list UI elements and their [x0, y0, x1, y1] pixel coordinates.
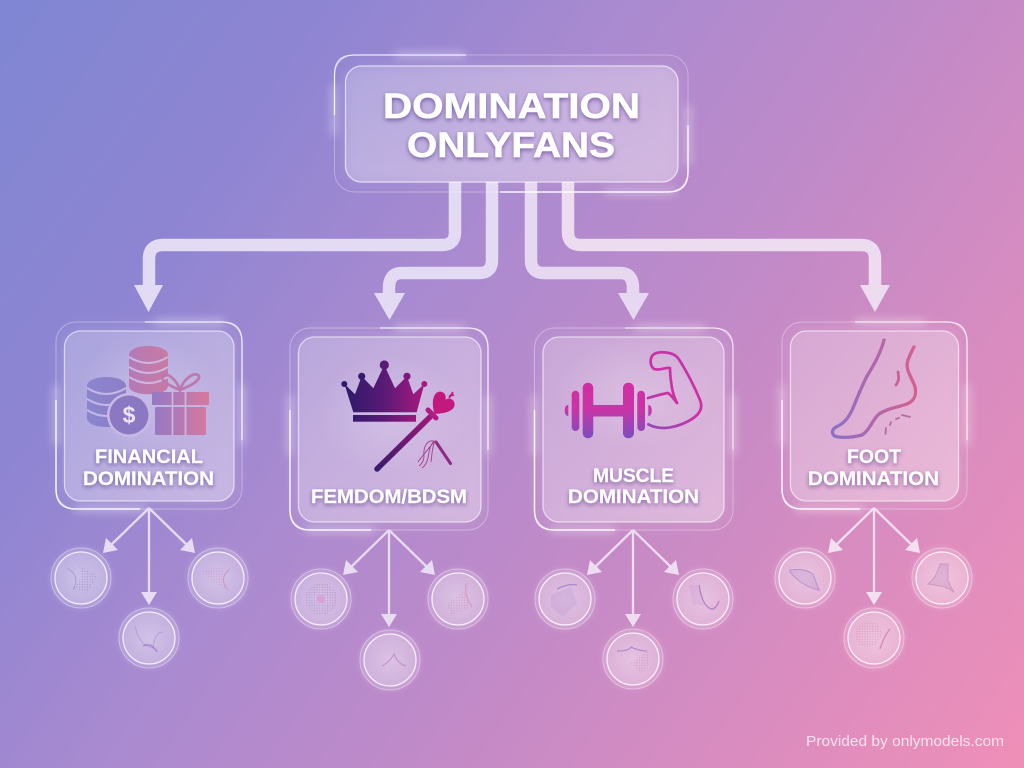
node 2	[911, 547, 973, 609]
node 3	[359, 629, 421, 691]
sub-branch arrows: muscle	[587, 530, 679, 627]
arrow to femdom/bdsm	[374, 182, 492, 320]
icon: crown, scepter and whip	[317, 355, 467, 475]
sub-node circles: femdom/bdsm	[290, 568, 489, 691]
sub-branch arrows: foot	[828, 508, 920, 605]
title text	[383, 87, 640, 165]
sub-node circles: financial	[50, 547, 249, 669]
arrow to financial domination	[134, 182, 455, 312]
sub-node circles: muscle	[534, 568, 734, 690]
label: muscle domination: DOMINATION	[568, 487, 699, 508]
label: muscle domination	[568, 466, 699, 508]
node 1	[290, 568, 352, 630]
arrow to foot domination	[568, 182, 890, 312]
label: foot domination: DOMINATION	[808, 469, 939, 490]
branching arrows from title to categories	[134, 182, 890, 320]
node 1	[774, 547, 836, 609]
panel: femdom/bdsm	[290, 328, 488, 530]
icon: coins and gift: $	[123, 402, 136, 428]
label: foot domination	[808, 447, 939, 490]
node 1	[534, 568, 596, 630]
panel: muscle domination	[534, 328, 733, 530]
title panel	[334, 55, 688, 192]
label: foot domination: FOOT	[847, 447, 901, 468]
node 2	[672, 568, 734, 630]
node 3	[602, 628, 664, 690]
credit text: Provided by onlymodels.com	[806, 734, 1004, 750]
panel: financial domination	[56, 322, 242, 509]
label: financial domination	[83, 447, 214, 490]
icon: foot	[832, 340, 916, 437]
icon: dumbbell and flexed arm	[554, 340, 714, 450]
node 2	[187, 547, 249, 609]
label: muscle domination: MUSCLE	[593, 466, 674, 487]
sub-node circles: foot	[774, 547, 973, 669]
node 3	[118, 607, 180, 669]
label: femdom/bdsm: FEMDOM/BDSM	[311, 487, 467, 508]
title text: ONLYFANS	[407, 126, 615, 165]
node 3	[843, 607, 905, 669]
label: financial domination: FINANCIAL	[95, 447, 203, 468]
sub-branch arrows: financial	[103, 508, 195, 605]
node 1	[50, 547, 112, 609]
label: financial domination: DOMINATION	[83, 469, 214, 490]
sub-branch arrows: femdom/bdsm	[343, 530, 435, 627]
node 2	[427, 568, 489, 630]
title text: DOMINATION	[383, 87, 640, 126]
arrow to muscle domination	[531, 182, 649, 320]
panel: foot domination	[782, 322, 967, 509]
icon: coins and gift	[79, 337, 219, 447]
